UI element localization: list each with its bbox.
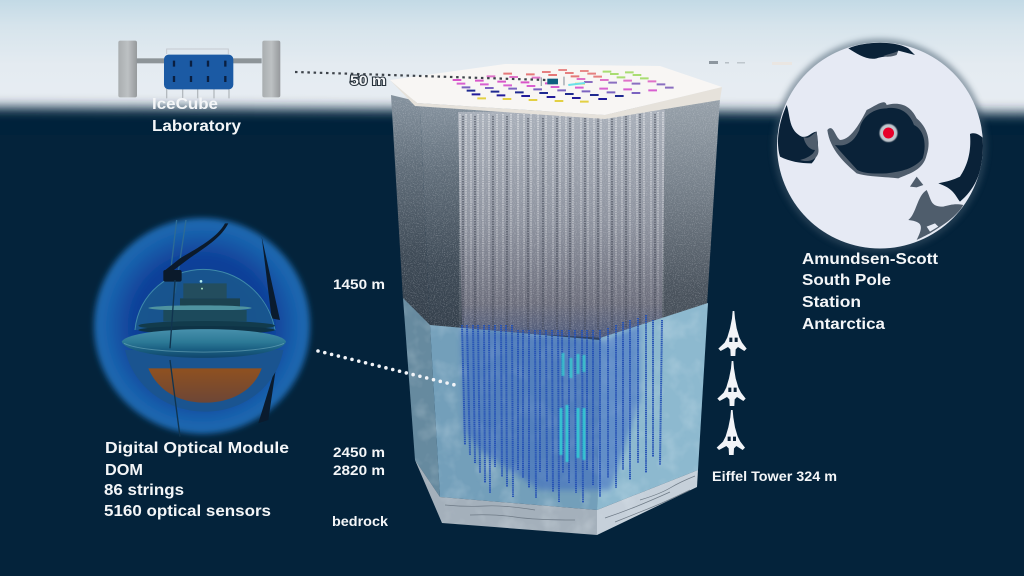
South America — [848, 43, 915, 59]
glass dome — [135, 269, 275, 330]
upper strings: ice-coloured lines — [460, 112, 663, 330]
label: Eiffel Tower scale: Eiffel Tower 324 m — [712, 469, 837, 484]
upper right face — [600, 98, 720, 340]
upper front face — [420, 102, 605, 340]
detector: surface slab with surface stations — [390, 64, 722, 119]
bedrock — [415, 460, 597, 535]
label: 50 m: 50 m — [350, 73, 386, 88]
text block: Digital Optical Module details: Digital Optical Module — [105, 440, 289, 457]
text block: Digital Optical Module details: 5160 optical sensors — [104, 503, 271, 520]
label: 2820 m depth: 2820 m — [333, 463, 385, 478]
icons: three stacked Eiffel Towers — [717, 311, 747, 455]
central string volume — [458, 110, 665, 338]
DOM illustration — [122, 220, 286, 437]
blue haze of dense strings — [461, 325, 640, 490]
text block: Digital Optical Module details — [104, 440, 289, 520]
distant buildings on the horizon — [709, 61, 792, 65]
label: IceCube Laboratory — [152, 96, 241, 135]
Australia — [938, 133, 984, 202]
highlighted cyan strings — [561, 353, 584, 462]
text block: station location: Amundsen-Scott — [802, 251, 939, 268]
upper strings: dark lines — [463, 114, 655, 330]
dotted link: laboratory to surface — [295, 72, 546, 80]
text block: station location: Antarctica — [802, 316, 885, 333]
dotted callout line: DOM to detector — [318, 351, 455, 385]
label: bedrock: bedrock — [332, 514, 389, 529]
Antarctica land — [835, 108, 925, 174]
text block: station location: South Pole — [802, 272, 891, 289]
cable — [163, 223, 228, 275]
equator band — [122, 329, 286, 358]
panel: Digital Optical Module close-up — [94, 218, 310, 437]
label: 2450 m depth: 2450 m — [333, 445, 385, 460]
New Zealand and Pacific islands — [910, 177, 923, 187]
map: globe centred on Antarctica — [773, 38, 987, 252]
blue strings of optical sensors — [462, 315, 662, 503]
text block: Digital Optical Module details: DOM — [105, 462, 143, 479]
text block: station location: Station — [802, 294, 861, 311]
upper left faces — [391, 95, 430, 327]
icon: IceCube Laboratory building — [118, 41, 280, 98]
South Pole marker — [880, 124, 898, 142]
Africa — [778, 105, 818, 163]
electronics boards — [183, 283, 227, 298]
detector: lower ice column — [400, 295, 710, 540]
text block: Digital Optical Module details: 86 strings — [104, 482, 184, 499]
text block: station location — [802, 251, 939, 333]
lower left face — [403, 298, 440, 497]
lower right face — [597, 303, 708, 510]
surface station dots — [453, 70, 674, 102]
label: IceCube Laboratory: Laboratory — [152, 118, 241, 135]
lower hemisphere — [125, 350, 283, 412]
label: IceCube Laboratory: IceCube — [152, 96, 218, 113]
Antarctica ice shelf — [827, 102, 929, 178]
lower front face — [430, 325, 600, 510]
background: snow surface and sky — [0, 0, 1024, 130]
detector: upper ice column — [390, 95, 725, 345]
label: 1450 m depth: 1450 m — [333, 277, 385, 292]
